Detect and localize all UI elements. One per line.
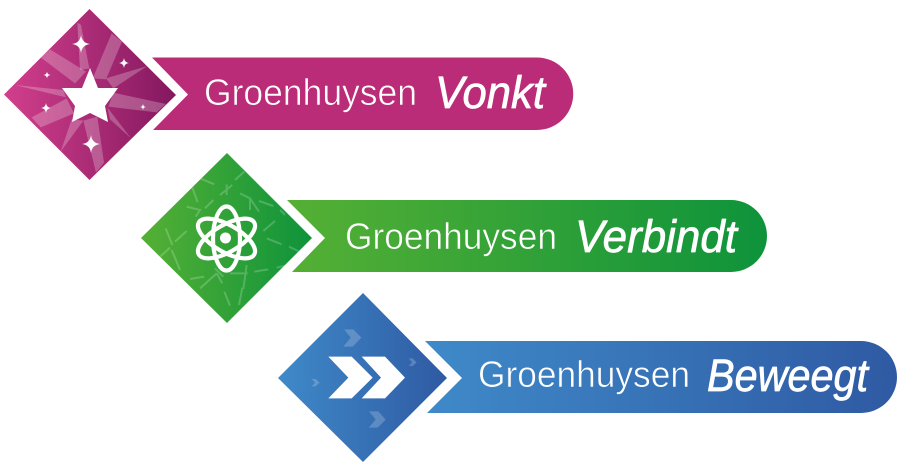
icon: double chevron xyxy=(328,357,405,398)
text: Groenhuysen Beweegt: Groenhuysen xyxy=(478,354,690,395)
icon: green diamond with atom xyxy=(141,153,312,323)
text: Groenhuysen Vonkt: Groenhuysen xyxy=(204,72,417,113)
text: Groenhuysen Vonkt xyxy=(204,67,547,118)
panel: Groenhuysen Verbindt xyxy=(141,153,767,323)
text: Groenhuysen Verbindt: Verbindt xyxy=(575,211,739,262)
icon: sparkles xyxy=(41,35,146,153)
text: Groenhuysen Beweegt: Beweegt xyxy=(707,350,870,401)
icon: pink diamond with star xyxy=(4,9,176,180)
text: Groenhuysen Verbindt: Groenhuysen xyxy=(345,216,557,257)
icon: atom xyxy=(192,206,261,270)
icon: blue diamond with chevrons xyxy=(278,293,447,462)
banner: Vonkt xyxy=(152,58,573,130)
text: Groenhuysen Vonkt: Vonkt xyxy=(435,67,547,118)
text: Groenhuysen Beweegt xyxy=(478,350,870,401)
panel: Groenhuysen Vonkt xyxy=(4,9,573,180)
text: Groenhuysen Verbindt xyxy=(345,211,739,262)
panel: Groenhuysen Beweegt xyxy=(278,293,897,462)
icon: star xyxy=(62,68,118,122)
banner: Verbindt xyxy=(287,200,767,272)
banner: Beweegt xyxy=(425,341,897,413)
